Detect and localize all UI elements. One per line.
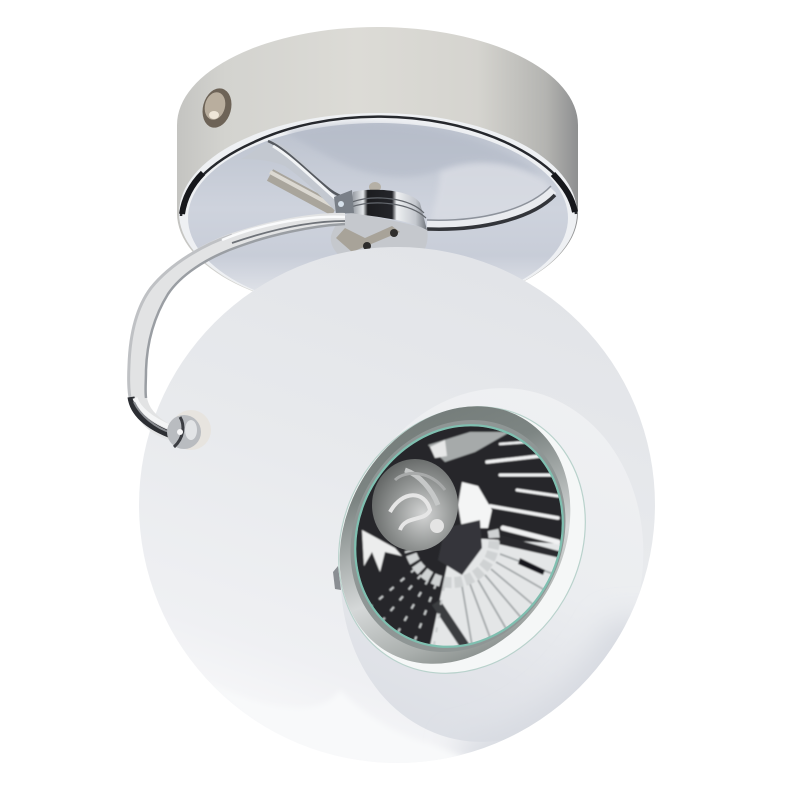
hub interior details bbox=[336, 226, 400, 252]
ceiling canopy bbox=[177, 27, 578, 313]
highlights upper right bbox=[487, 442, 558, 542]
dark slot in lower right bbox=[518, 558, 545, 575]
arm inner dark edge bbox=[146, 224, 345, 398]
lower left dashes bbox=[369, 569, 444, 645]
hub lower cup bbox=[331, 212, 428, 256]
product illustration: ceiling spot lamp bbox=[127, 27, 655, 758]
plate light patch bbox=[430, 164, 552, 222]
ring of bright teeth bbox=[410, 530, 494, 583]
frosted glass globe bbox=[139, 247, 680, 780]
bright lower right reflector bbox=[429, 538, 560, 646]
mounting knob bbox=[167, 410, 211, 450]
hub cylinder bbox=[351, 190, 427, 230]
back pin bbox=[270, 175, 335, 210]
chrome rim shading bbox=[181, 117, 576, 216]
plate reflection bbox=[285, 123, 540, 177]
bracket bbox=[241, 141, 555, 256]
washer bbox=[171, 410, 211, 450]
arm highlight bbox=[222, 217, 345, 240]
lens outer bezel bbox=[294, 364, 616, 706]
right bracket arm bbox=[427, 190, 553, 224]
lens recess bbox=[341, 388, 626, 742]
lower right shade bbox=[456, 617, 628, 754]
outer glass ring bbox=[291, 361, 633, 719]
centre dark reflection bbox=[438, 520, 482, 575]
joint sparkle bbox=[334, 190, 354, 214]
reflector bbox=[356, 426, 562, 646]
curved arm bbox=[128, 213, 345, 441]
upper bracket arm bbox=[241, 141, 350, 214]
back stud bbox=[369, 182, 381, 192]
green glass edge bbox=[315, 387, 603, 685]
centre bright socket bbox=[458, 482, 492, 528]
chrome rim ring bbox=[179, 113, 577, 313]
dark streak, bottom bbox=[432, 600, 470, 650]
white teeth under bulb bbox=[362, 530, 402, 572]
canopy side band bbox=[177, 27, 578, 313]
chrome tip bbox=[333, 566, 341, 590]
knob bbox=[167, 415, 201, 449]
mounting screw bbox=[198, 85, 236, 131]
arm tube bbox=[128, 213, 345, 441]
lower rim highlight bbox=[445, 754, 456, 758]
spotlight lens bbox=[333, 406, 586, 674]
upper glare bbox=[428, 432, 510, 462]
arm outer grey edge bbox=[129, 235, 232, 402]
silver inner ring bbox=[309, 381, 607, 691]
chrome elbow bbox=[131, 397, 174, 436]
halogen bulb bbox=[372, 459, 458, 551]
grey radial streaks, lower right bbox=[462, 554, 556, 645]
canopy underside plate bbox=[188, 123, 568, 313]
